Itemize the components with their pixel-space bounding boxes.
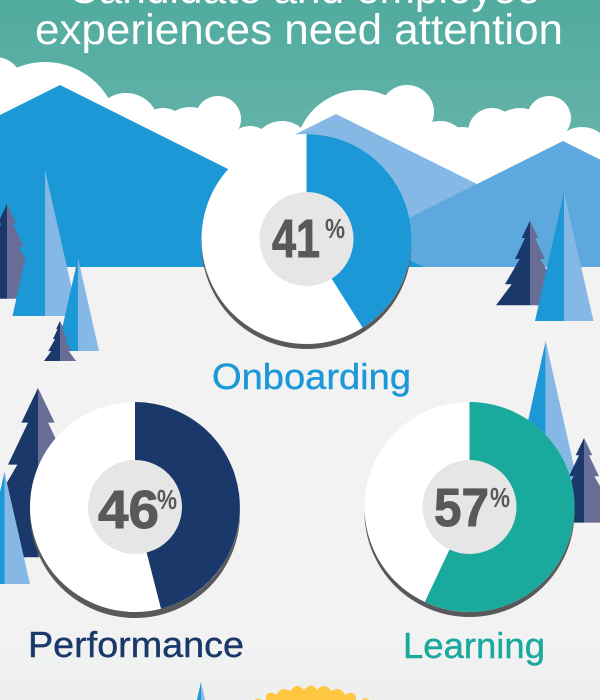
tree: dark spruce upper left — [0, 204, 45, 299]
donut: onboarding 41%: 41 — [272, 209, 320, 269]
tree: cone mid right — [515, 341, 577, 480]
donut: learning 57% — [364, 402, 575, 617]
donut: onboarding 41%: % — [325, 213, 345, 244]
donut: learning 57%: % — [490, 482, 510, 513]
tree: cone lower left — [0, 472, 30, 584]
tree: dark spruce mid right — [550, 438, 600, 523]
title: experiences need attention — [35, 6, 563, 54]
tree: small cone left — [57, 258, 99, 351]
tree: tall cone upper left — [12, 170, 78, 316]
tree: dark spruce lower left — [0, 388, 106, 557]
mountain: centre shadow sliver — [300, 200, 424, 267]
donut: performance 46%: 46 — [98, 480, 159, 540]
mountain: right — [409, 141, 600, 267]
label: Onboarding: Onboarding — [212, 356, 411, 397]
sky background — [0, 0, 600, 200]
tree: dark spruce upper right — [496, 221, 564, 305]
tree: cone upper right — [535, 192, 594, 321]
clouds — [0, 57, 600, 270]
mountain: centre light — [295, 114, 600, 267]
mountain: left — [0, 85, 300, 267]
sun badge — [255, 686, 369, 700]
label: Performance: Performance — [28, 624, 244, 665]
donut: learning 57%: 57 — [434, 478, 489, 538]
donut: onboarding 41% — [202, 134, 412, 349]
donut: performance 46%: % — [157, 484, 177, 515]
tree: tiny spruce left — [44, 321, 76, 361]
tree: cone bottom — [197, 682, 205, 700]
label: Learning: Learning — [403, 625, 545, 666]
donut: performance 46% — [30, 402, 240, 618]
snow ground — [0, 267, 600, 700]
